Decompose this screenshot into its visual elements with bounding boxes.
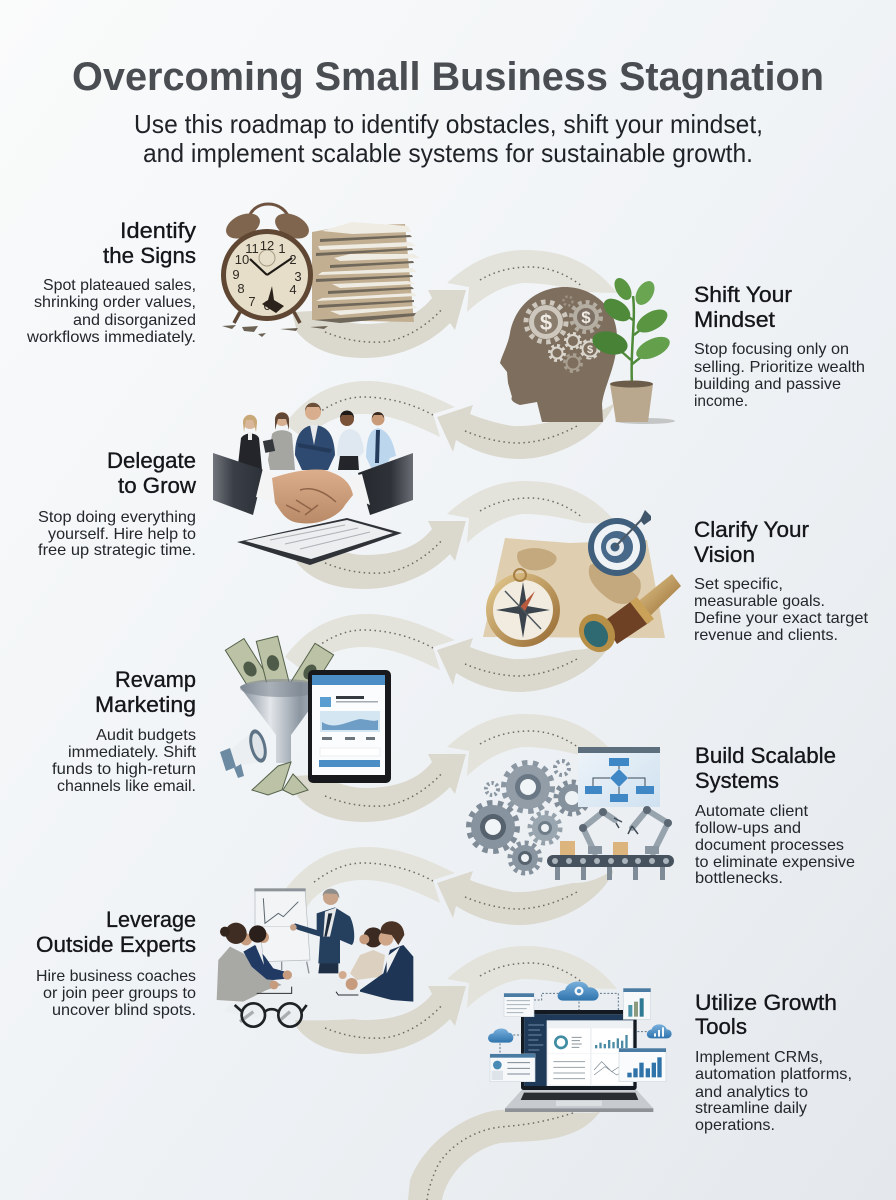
icon: cluster of gears — [469, 761, 588, 873]
body: document processes — [695, 837, 844, 854]
body: Stop doing everything — [38, 509, 196, 526]
clock numerals: 7 — [248, 294, 256, 309]
person 4 — [337, 410, 364, 470]
body: or join peer groups to — [43, 985, 196, 1002]
body: to eliminate expensive — [695, 854, 855, 871]
body: Audit budgets — [96, 727, 196, 744]
card: top right — [623, 988, 651, 1019]
heading: Build Scalable — [695, 743, 836, 768]
clock numerals: 1 — [278, 241, 286, 256]
bills below funnel — [252, 762, 308, 795]
gear — [510, 843, 540, 873]
title: Overcoming Small Business Stagnation — [72, 55, 824, 99]
icon: flowchart window — [578, 747, 660, 807]
icon: floating dashboard cards and clouds — [488, 981, 672, 1082]
heading: Mindset — [694, 307, 776, 332]
clock numerals: 8 — [237, 281, 245, 296]
heading: Systems — [695, 768, 779, 793]
arrow: systems to experts — [285, 847, 613, 925]
heading: Leverage — [106, 907, 196, 932]
heading: Marketing — [95, 692, 196, 717]
body: yourself. Hire help to — [48, 526, 196, 543]
subtitle — [134, 109, 763, 168]
clock numerals: 4 — [289, 282, 297, 297]
icon: head silhouette with gears: $ — [581, 308, 591, 327]
table — [223, 977, 410, 1020]
person 2 — [263, 412, 295, 470]
arrow: signs to mindset — [292, 250, 617, 358]
connector lines — [500, 993, 647, 1054]
gear — [469, 803, 517, 851]
gear — [530, 813, 560, 843]
arrow: experts to tools — [292, 946, 617, 1054]
body: uncover blind spots. — [52, 1002, 196, 1019]
icon: head silhouette with gears — [500, 287, 617, 422]
body: Stop focusing only on — [694, 341, 849, 358]
card: lower right bar chart — [619, 1048, 666, 1082]
heading — [36, 907, 196, 957]
heading: Outside Experts — [36, 932, 196, 957]
step 3 text: Delegate to Grow — [38, 448, 197, 559]
arrow: mindset to delegate — [285, 381, 613, 459]
heading: Clarify Your — [694, 517, 810, 542]
arrow: delegate to vision — [292, 481, 617, 589]
gear — [555, 761, 569, 775]
icon: head silhouette with gears: $ — [540, 310, 552, 335]
body: channels like email. — [57, 778, 196, 795]
body: Define your exact target — [694, 610, 869, 627]
body: workflows immediately. — [26, 329, 196, 346]
icon: money in funnel — [225, 636, 334, 795]
person 5 — [366, 412, 396, 470]
gear — [504, 763, 552, 811]
body: automation platforms, — [695, 1066, 852, 1083]
clock numerals: 6 — [263, 298, 271, 313]
heading: Identify — [120, 218, 197, 243]
body: Implement CRMs, — [695, 1049, 823, 1066]
arrow: vision to marketing — [285, 614, 613, 692]
arrow: path continuing from growth tools — [408, 1110, 600, 1200]
body: and disorganized — [73, 312, 196, 329]
person 1 — [238, 415, 262, 470]
body: immediately. Shift — [68, 744, 197, 761]
left attendees — [217, 923, 292, 1002]
clock numerals: 10 — [235, 252, 249, 267]
gear — [486, 783, 498, 795]
body — [694, 576, 869, 644]
heading: Tools — [695, 1014, 747, 1039]
icon: meeting with presenter — [217, 888, 413, 1020]
body — [26, 277, 196, 346]
body: income. — [694, 393, 748, 410]
heading — [103, 218, 197, 268]
heading: the Signs — [103, 243, 196, 268]
right attendees — [339, 921, 413, 1002]
clock numerals: 2 — [289, 252, 297, 267]
body: streamline daily — [695, 1100, 807, 1117]
icon: team of five professionals — [238, 403, 396, 470]
body: follow-ups and — [695, 820, 801, 837]
table paperwork — [257, 987, 358, 995]
step 8 text: Utilize Growth Tools — [695, 990, 852, 1134]
body: and analytics to — [695, 1084, 808, 1101]
body — [52, 727, 197, 795]
body: bottlenecks. — [695, 870, 783, 887]
clock numerals: 3 — [294, 269, 302, 284]
icon: laptop with analytics dashboard — [505, 1010, 653, 1112]
icon: broken alarm clock — [221, 204, 328, 337]
clock numerals: 12 — [260, 238, 274, 253]
heading: Vision — [694, 542, 755, 567]
heading: Shift Your — [694, 282, 793, 307]
icon: eyeglasses — [235, 1003, 307, 1027]
heading: Revamp — [115, 667, 196, 692]
body: funds to high-return — [52, 761, 196, 778]
icon: megaphone — [220, 728, 270, 778]
arrow: marketing to systems — [292, 714, 617, 822]
card: top left — [504, 993, 534, 1017]
icon: telescope — [572, 574, 681, 659]
heading: Delegate — [107, 448, 196, 473]
cloud: left — [488, 1028, 513, 1043]
subtitle: Use this roadmap to identify obstacles, shift your mindset, — [134, 109, 763, 139]
flip chart — [254, 888, 310, 973]
cloud: main with gear — [558, 981, 599, 1001]
body — [695, 1049, 852, 1134]
dollar bills above funnel — [225, 636, 334, 701]
heading — [95, 667, 196, 717]
icon: target with arrow — [588, 510, 651, 576]
body: free up strategic time. — [38, 542, 196, 559]
step 7 text: Leverage Outside Experts — [36, 907, 196, 1019]
card: lower left — [490, 1054, 535, 1082]
icon: clipboard document — [237, 518, 402, 565]
icon: potted plant — [590, 275, 675, 424]
step 1 text: Identify the Signs — [26, 218, 197, 346]
icon: tablet with email form — [308, 670, 391, 783]
heading — [107, 448, 197, 498]
clock numerals — [232, 238, 302, 313]
step 5 text: Revamp Marketing — [52, 667, 197, 795]
body: Spot plateaued sales, — [43, 277, 196, 294]
body: building and passive — [694, 376, 841, 393]
cloud: right with bars — [647, 1024, 672, 1038]
gear — [556, 782, 588, 814]
body: selling. Prioritize wealth — [694, 359, 865, 376]
icon: handshake — [213, 453, 413, 524]
heading — [694, 282, 793, 332]
body: measurable goals. — [694, 593, 825, 610]
heading: to Grow — [118, 473, 197, 498]
body: shrinking order values, — [34, 294, 196, 311]
step 4 text: Clarify Your Vision — [694, 517, 869, 644]
body — [36, 968, 196, 1019]
presenter — [290, 889, 354, 973]
subtitle: and implement scalable systems for sustainable growth. — [143, 138, 753, 168]
heading — [694, 517, 810, 567]
icon: antique map — [483, 538, 665, 638]
clock numerals: 9 — [232, 267, 240, 282]
icon: robot arms on conveyor — [547, 806, 674, 880]
step 2 text: Shift Your Mindset — [694, 282, 865, 410]
clock numerals: 11 — [245, 241, 259, 256]
heading: Utilize Growth — [695, 990, 837, 1015]
body: operations. — [695, 1117, 775, 1134]
body — [695, 803, 855, 887]
broken fragments — [222, 325, 328, 337]
heading — [695, 743, 836, 793]
body: Automate client — [695, 803, 809, 820]
step 6 text: Build Scalable Systems — [695, 743, 855, 887]
body — [694, 341, 865, 410]
gears with dollar signs — [526, 296, 601, 371]
icon: compass — [486, 569, 560, 647]
body: Set specific, — [694, 576, 783, 593]
icon: paper stack — [312, 222, 420, 323]
body: revenue and clients. — [694, 627, 838, 644]
person 3 — [295, 403, 335, 470]
icon: head silhouette with gears: $ — [587, 344, 593, 356]
body — [38, 509, 196, 559]
body: Hire business coaches — [36, 968, 196, 985]
heading — [695, 990, 837, 1039]
